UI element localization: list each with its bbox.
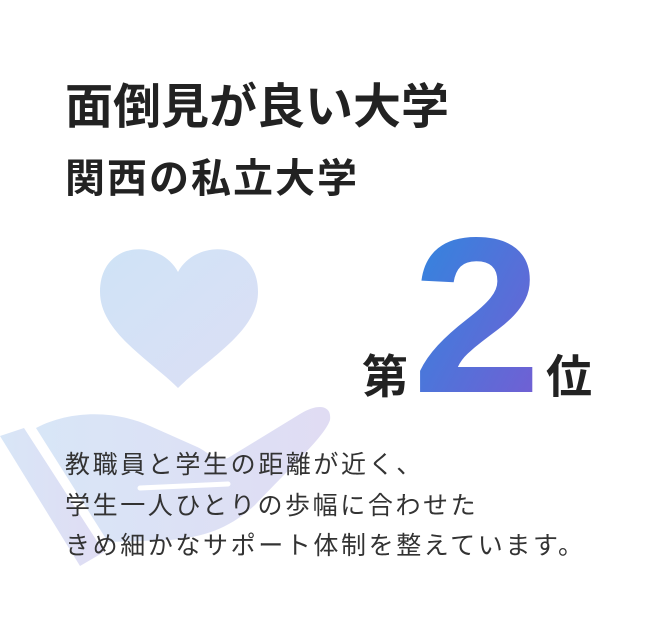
subtitle: 関西の私立大学 xyxy=(65,157,359,201)
rank suffix: 位 xyxy=(546,351,592,403)
rank: 第2位 xyxy=(362,215,592,415)
description text: きめ細かなサポート体制を整えています。 xyxy=(65,532,586,560)
description text: 学生一人ひとりの歩幅に合わせた xyxy=(65,492,478,520)
icon: hand xyxy=(0,407,330,566)
description text xyxy=(65,451,586,560)
description text: 教職員と学生の距離が近く、 xyxy=(65,451,424,479)
icon: heart xyxy=(100,249,258,388)
rank prefix: 第 xyxy=(362,351,408,403)
title: 面倒見が良い大学 xyxy=(65,81,449,134)
